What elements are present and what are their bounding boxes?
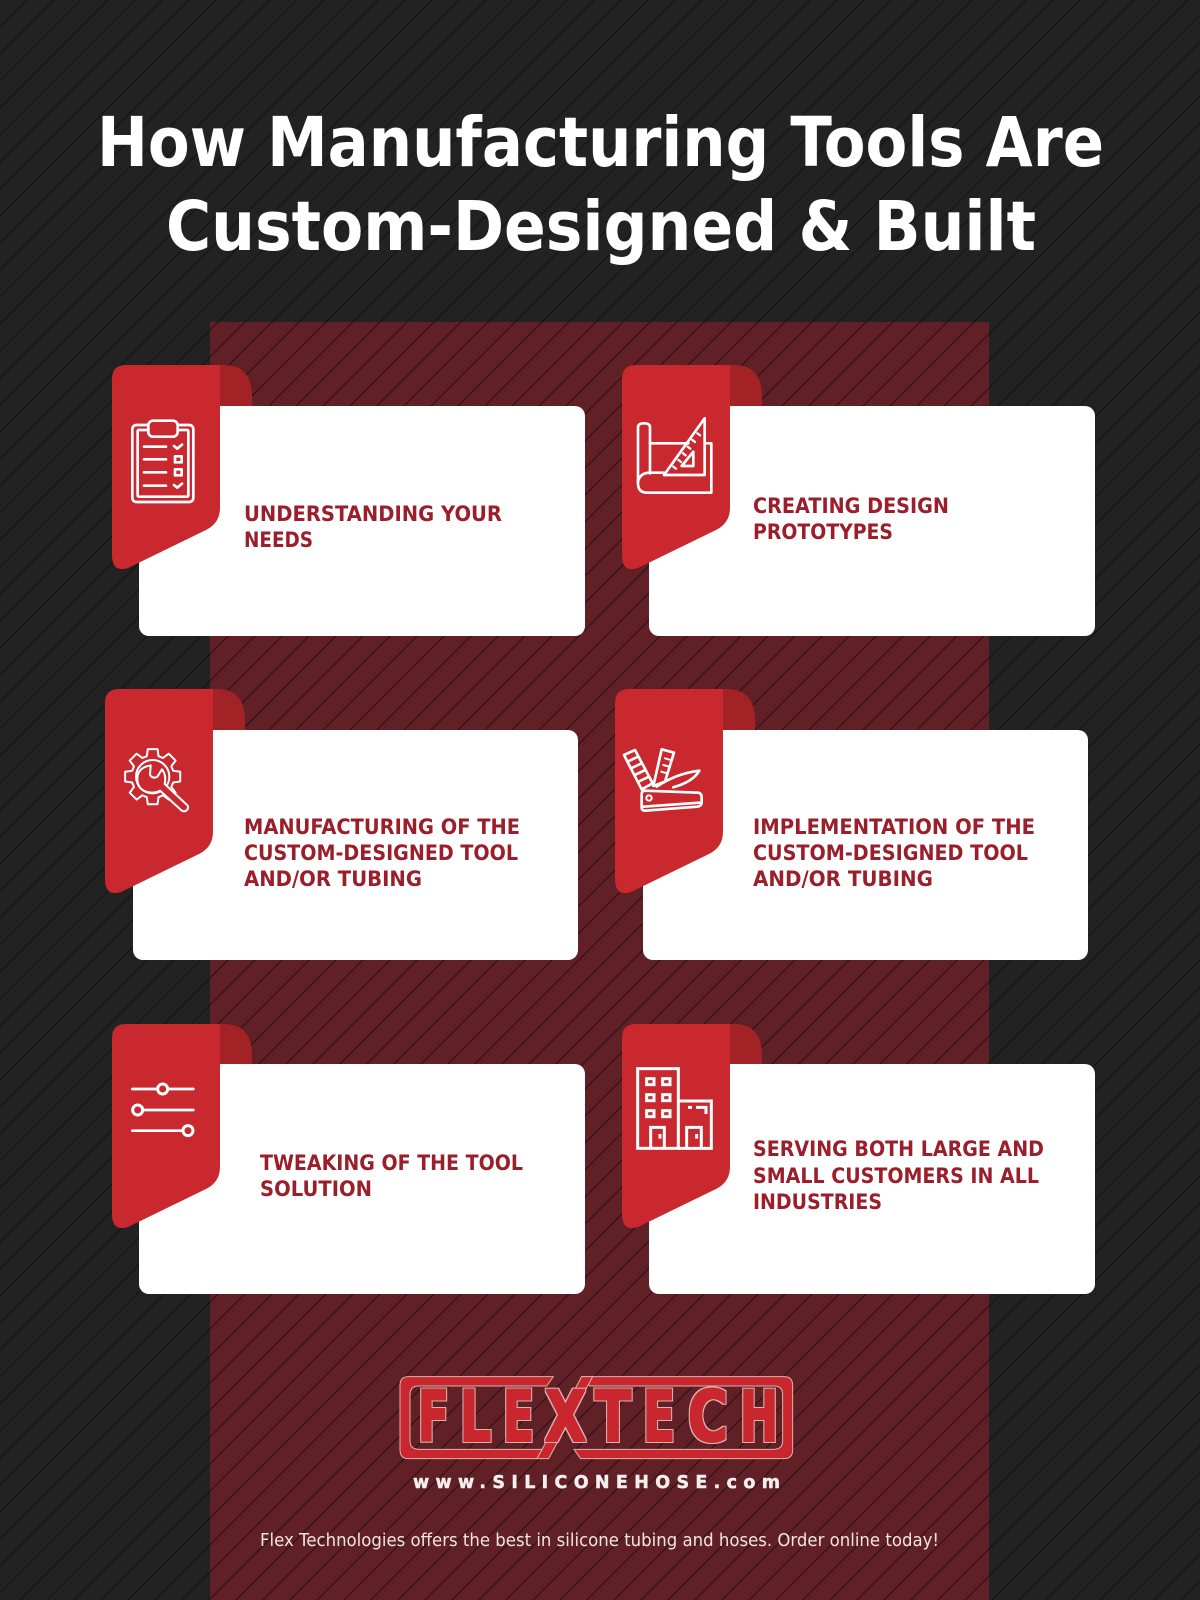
- card 6: serving customers: [622, 1024, 1095, 1294]
- footer text: Flex Technologies offers the best in silicone tubing and hoses. Order online today!: [260, 1531, 939, 1551]
- text: creating design prototypes: [753, 494, 949, 545]
- text: understanding your needs: NEEDS: [244, 528, 313, 553]
- card 2: creating design prototypes: [622, 365, 1095, 636]
- logo: Flextech: E: [643, 1376, 675, 1458]
- text: manufacturing: CUSTOM-DESIGNED TOOL: [244, 841, 518, 866]
- center red panel: [210, 322, 989, 1600]
- logo: Flextech: F: [418, 1376, 449, 1458]
- card 4: implementation: [615, 689, 1088, 960]
- icon: clipboard checklist: [132, 421, 193, 502]
- text: serving customers: SMALL CUSTOMERS IN ALL: [753, 1164, 1039, 1189]
- logo: Flextech: L: [460, 1376, 491, 1458]
- logo: Flextech: C: [688, 1376, 728, 1458]
- text: understanding your needs: UNDERSTANDING YOUR: [244, 502, 502, 527]
- card 1: understanding your needs: [112, 365, 585, 636]
- text: manufacturing: [244, 815, 520, 892]
- text: implementation: CUSTOM-DESIGNED TOOL: [753, 841, 1028, 866]
- text: implementation: [753, 815, 1035, 892]
- text: implementation: IMPLEMENTATION OF THE: [753, 815, 1035, 840]
- icon: sliders: [132, 1084, 193, 1136]
- text: tweaking: [260, 1151, 523, 1202]
- logo: Flextech: T: [595, 1376, 631, 1458]
- icon: multi-tool: [624, 749, 702, 811]
- logo: Flextech: H: [740, 1376, 778, 1458]
- text: manufacturing: MANUFACTURING OF THE: [244, 815, 520, 840]
- text: implementation: AND/OR TUBING: [753, 867, 933, 892]
- text: creating design prototypes: PROTOTYPES: [753, 520, 893, 545]
- text: tweaking: TWEAKING OF THE TOOL: [260, 1151, 523, 1176]
- text: tweaking: SOLUTION: [260, 1177, 372, 1202]
- text: creating design prototypes: CREATING DESIGN: [753, 494, 949, 519]
- logo: Flextech: [400, 1376, 793, 1493]
- text: understanding your needs: [244, 502, 502, 553]
- text: serving customers: [753, 1137, 1044, 1215]
- card 3: manufacturing: [105, 689, 578, 960]
- icon: blueprint and set square: [638, 418, 711, 493]
- card 5: tweaking: [112, 1024, 585, 1294]
- logo: Flextech: E: [503, 1376, 534, 1458]
- text: serving customers: INDUSTRIES: [753, 1190, 882, 1215]
- icon: buildings: [638, 1069, 711, 1148]
- logo url: www.SILICONEHOSE.com: [413, 1473, 780, 1493]
- title: Custom-Designed & Built: [166, 187, 1036, 267]
- icon: gear and wrench: [125, 749, 188, 811]
- title: [97, 103, 1104, 267]
- logo: Flextech: X: [545, 1376, 586, 1458]
- text: serving customers: SERVING BOTH LARGE AND: [753, 1137, 1044, 1162]
- text: manufacturing: AND/OR TUBING: [244, 867, 422, 892]
